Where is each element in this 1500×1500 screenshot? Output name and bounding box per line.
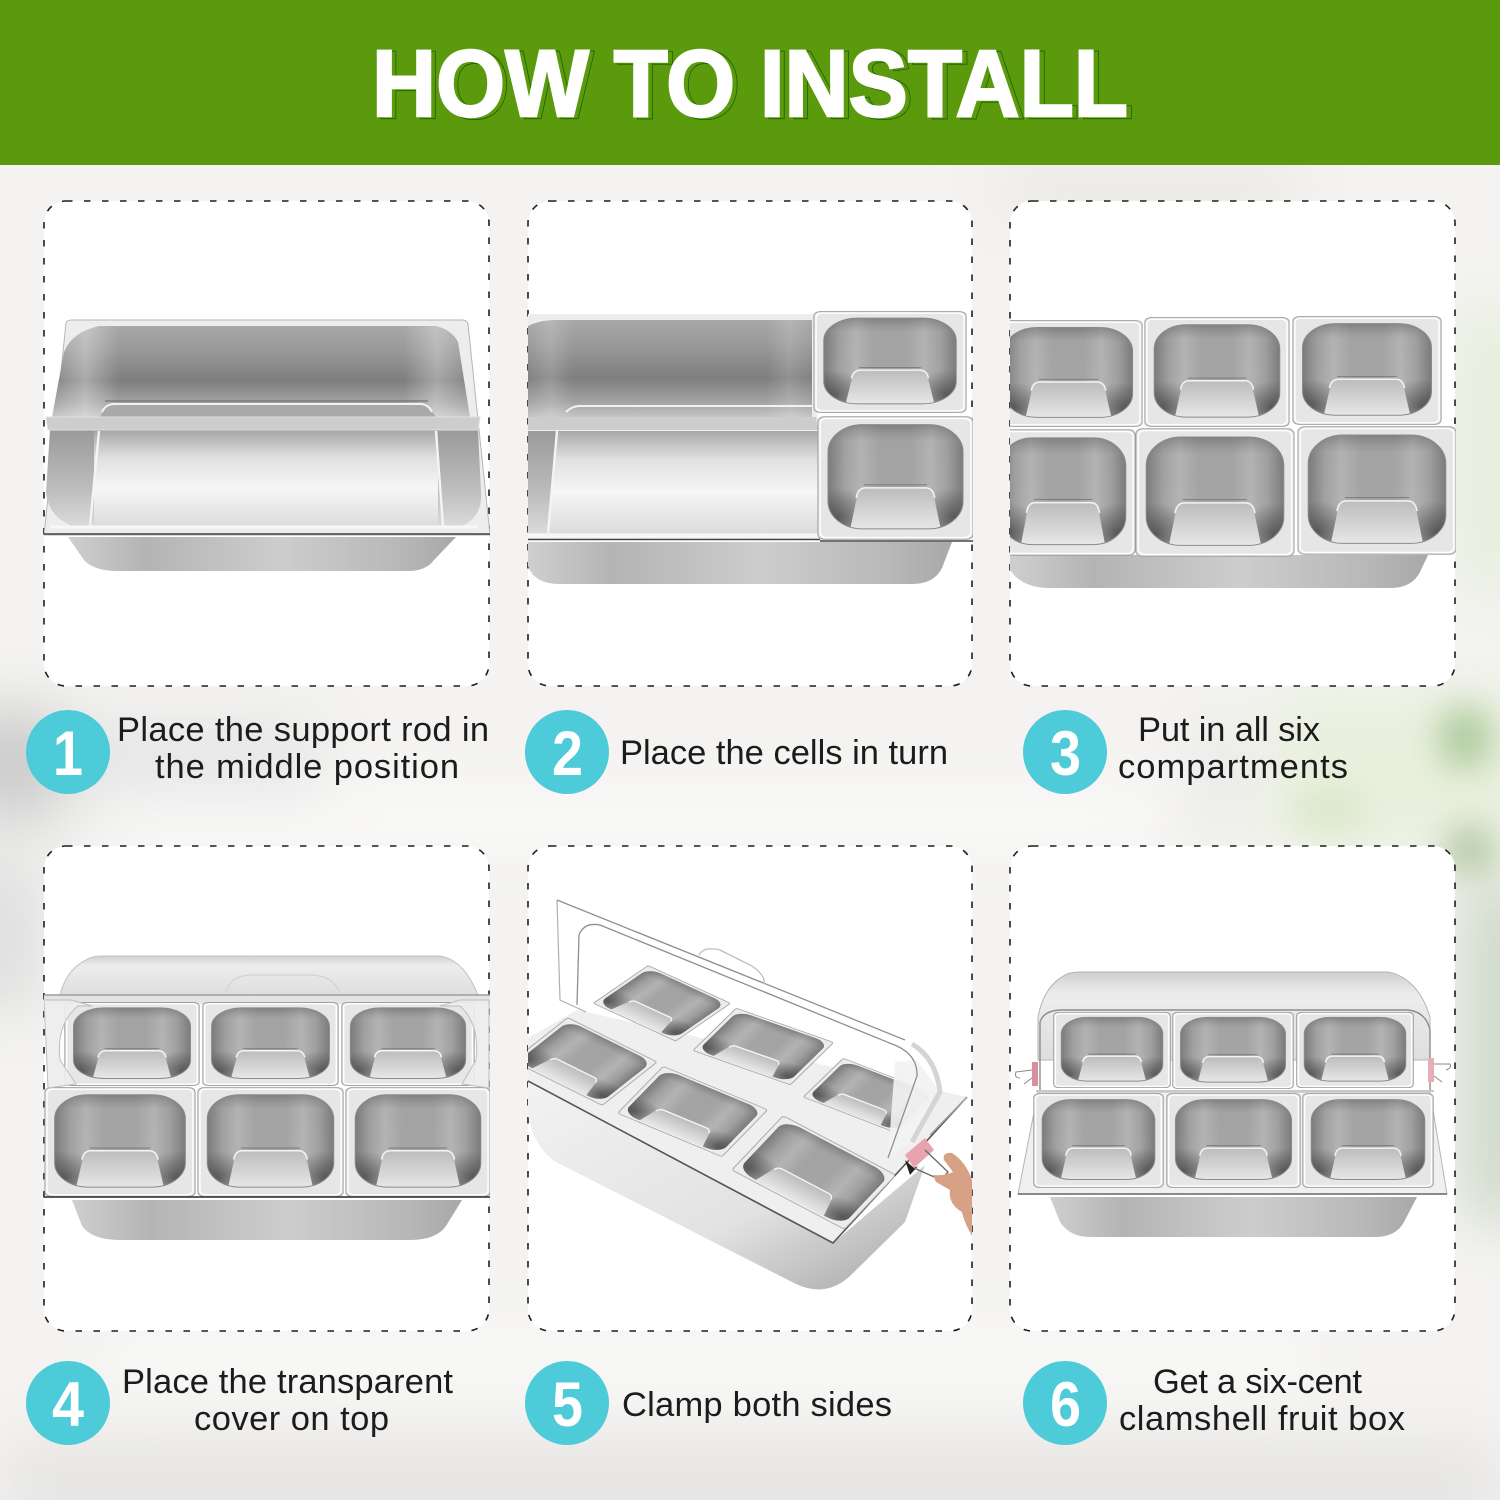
tray with two cells: [528, 312, 991, 584]
step 4 caption: cover on top: [194, 1400, 389, 1438]
panel 6 frame: [1010, 846, 1455, 1331]
step 1 caption: Place the support rod in: [117, 711, 489, 749]
title: HOW TO INSTALL: [372, 31, 1128, 137]
step 3 caption: compartments: [1118, 748, 1348, 786]
step 2 badge: [525, 710, 609, 794]
panel 5: clamp both sides: [491, 846, 972, 1331]
left clip: [1016, 1062, 1038, 1086]
panel 1 frame: [44, 201, 489, 686]
step 6 badge: 6: [1050, 1370, 1081, 1440]
panel 3: all six compartments: [1009, 200, 1456, 687]
step 6 caption: [1119, 1363, 1405, 1438]
tray with six cells and cover: [27, 956, 507, 1240]
step 4 badge: 4: [52, 1370, 84, 1440]
panel 5 frame: [528, 846, 972, 1331]
step 5 badge: [525, 1361, 609, 1445]
panel 2 frame: [528, 201, 972, 686]
tray with six cells: [1010, 316, 1456, 588]
open transparent cover: [557, 900, 967, 1158]
panel 2: cells placed in turn: [528, 201, 991, 686]
step 3 badge: [1023, 710, 1107, 794]
title: HOW TO INSTALL: [376, 32, 1133, 138]
step 2 badge: 2: [552, 719, 583, 789]
step 6 caption: Get a six-cent: [1153, 1363, 1362, 1401]
tray in perspective: [491, 900, 972, 1289]
panel 1: support rod in tray: [44, 201, 490, 686]
step 5 caption: Clamp both sides: [622, 1386, 892, 1424]
step 5 badge: 5: [552, 1370, 583, 1440]
panel 4 frame: [44, 846, 489, 1331]
panel 4: transparent cover on top: [27, 846, 507, 1331]
transparent dome cover: [1038, 972, 1430, 1060]
panel 6: clamshell fruit box: [1010, 846, 1455, 1331]
six cells: [528, 966, 912, 1229]
step 1 badge: [26, 710, 110, 794]
transparent dome cover: [60, 956, 478, 995]
step 4 caption: [122, 1363, 453, 1438]
panel 3 frame: [1010, 201, 1455, 686]
step 6 badge: [1023, 1361, 1107, 1445]
header band: [0, 0, 1500, 165]
hand: [933, 1153, 972, 1236]
upper right cell: [813, 311, 967, 413]
step 3 caption: Put in all six: [1138, 711, 1320, 749]
right clip: [1428, 1058, 1450, 1082]
step 6 caption: clamshell fruit box: [1119, 1400, 1405, 1438]
pink binder clip: [905, 1138, 948, 1180]
step 2 caption: Place the cells in turn: [620, 734, 948, 772]
step 4 caption: Place the transparent: [122, 1363, 453, 1401]
title: HOW TO INSTALL: [376, 32, 1133, 138]
lower right cell: [817, 416, 973, 540]
step 3 badge: 3: [1050, 719, 1081, 789]
tray with support rod: [44, 320, 490, 571]
step 1 caption: [117, 711, 489, 786]
step 3 caption: [1118, 711, 1348, 786]
closed tray with cover: [1016, 972, 1450, 1237]
step 1 caption: the middle position: [155, 748, 459, 786]
step 4 badge: [26, 1361, 110, 1445]
step 1 badge: 1: [53, 719, 83, 789]
